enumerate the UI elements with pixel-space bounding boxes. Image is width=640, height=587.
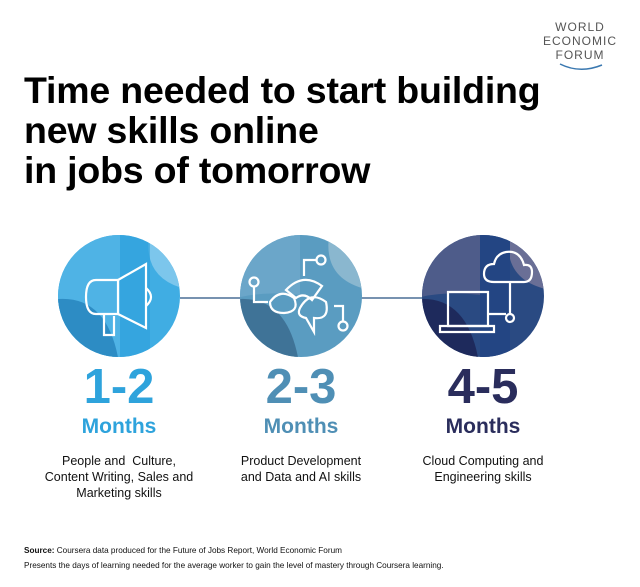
column 3: Cloud Computing and xyxy=(423,454,543,468)
logo: ECONOMIC xyxy=(543,34,617,48)
column 2: 2-3 xyxy=(266,360,336,414)
column 2: Months xyxy=(264,415,338,438)
logo: FORUM xyxy=(556,48,604,62)
title: in jobs of tomorrow xyxy=(24,149,370,191)
logo: WORLD xyxy=(555,20,605,34)
icon: megaphone circle xyxy=(58,235,180,357)
source note xyxy=(24,546,444,570)
icon: cloud laptop circle xyxy=(422,235,544,357)
column 1: 1-2 xyxy=(84,360,154,414)
column 1: Marketing skills xyxy=(76,486,162,500)
column 1 xyxy=(45,360,193,500)
column 3: Months xyxy=(446,415,520,438)
column 2 xyxy=(241,360,361,484)
source note: Presents the days of learning needed for the average worker to gain the level of mastery through Coursera learning. xyxy=(24,561,444,570)
column 1: People and Culture, xyxy=(62,454,176,468)
source note: Source: Coursera data produced for the Future of Jobs Report, World Economic Forum xyxy=(24,546,342,555)
title: Time needed to start building xyxy=(24,69,540,111)
column 1: Months xyxy=(82,415,156,438)
icon: data brain circle xyxy=(240,235,362,357)
column 2: and Data and AI skills xyxy=(241,470,361,484)
column 1: Content Writing, Sales and xyxy=(45,470,193,484)
column 3: Engineering skills xyxy=(434,470,532,484)
title xyxy=(24,69,540,191)
column 3: 4-5 xyxy=(448,360,518,414)
logo xyxy=(543,20,617,70)
column 2: Product Development xyxy=(241,454,361,468)
title: new skills online xyxy=(24,109,319,151)
column 3 xyxy=(423,360,543,484)
circles graphic xyxy=(58,235,544,357)
